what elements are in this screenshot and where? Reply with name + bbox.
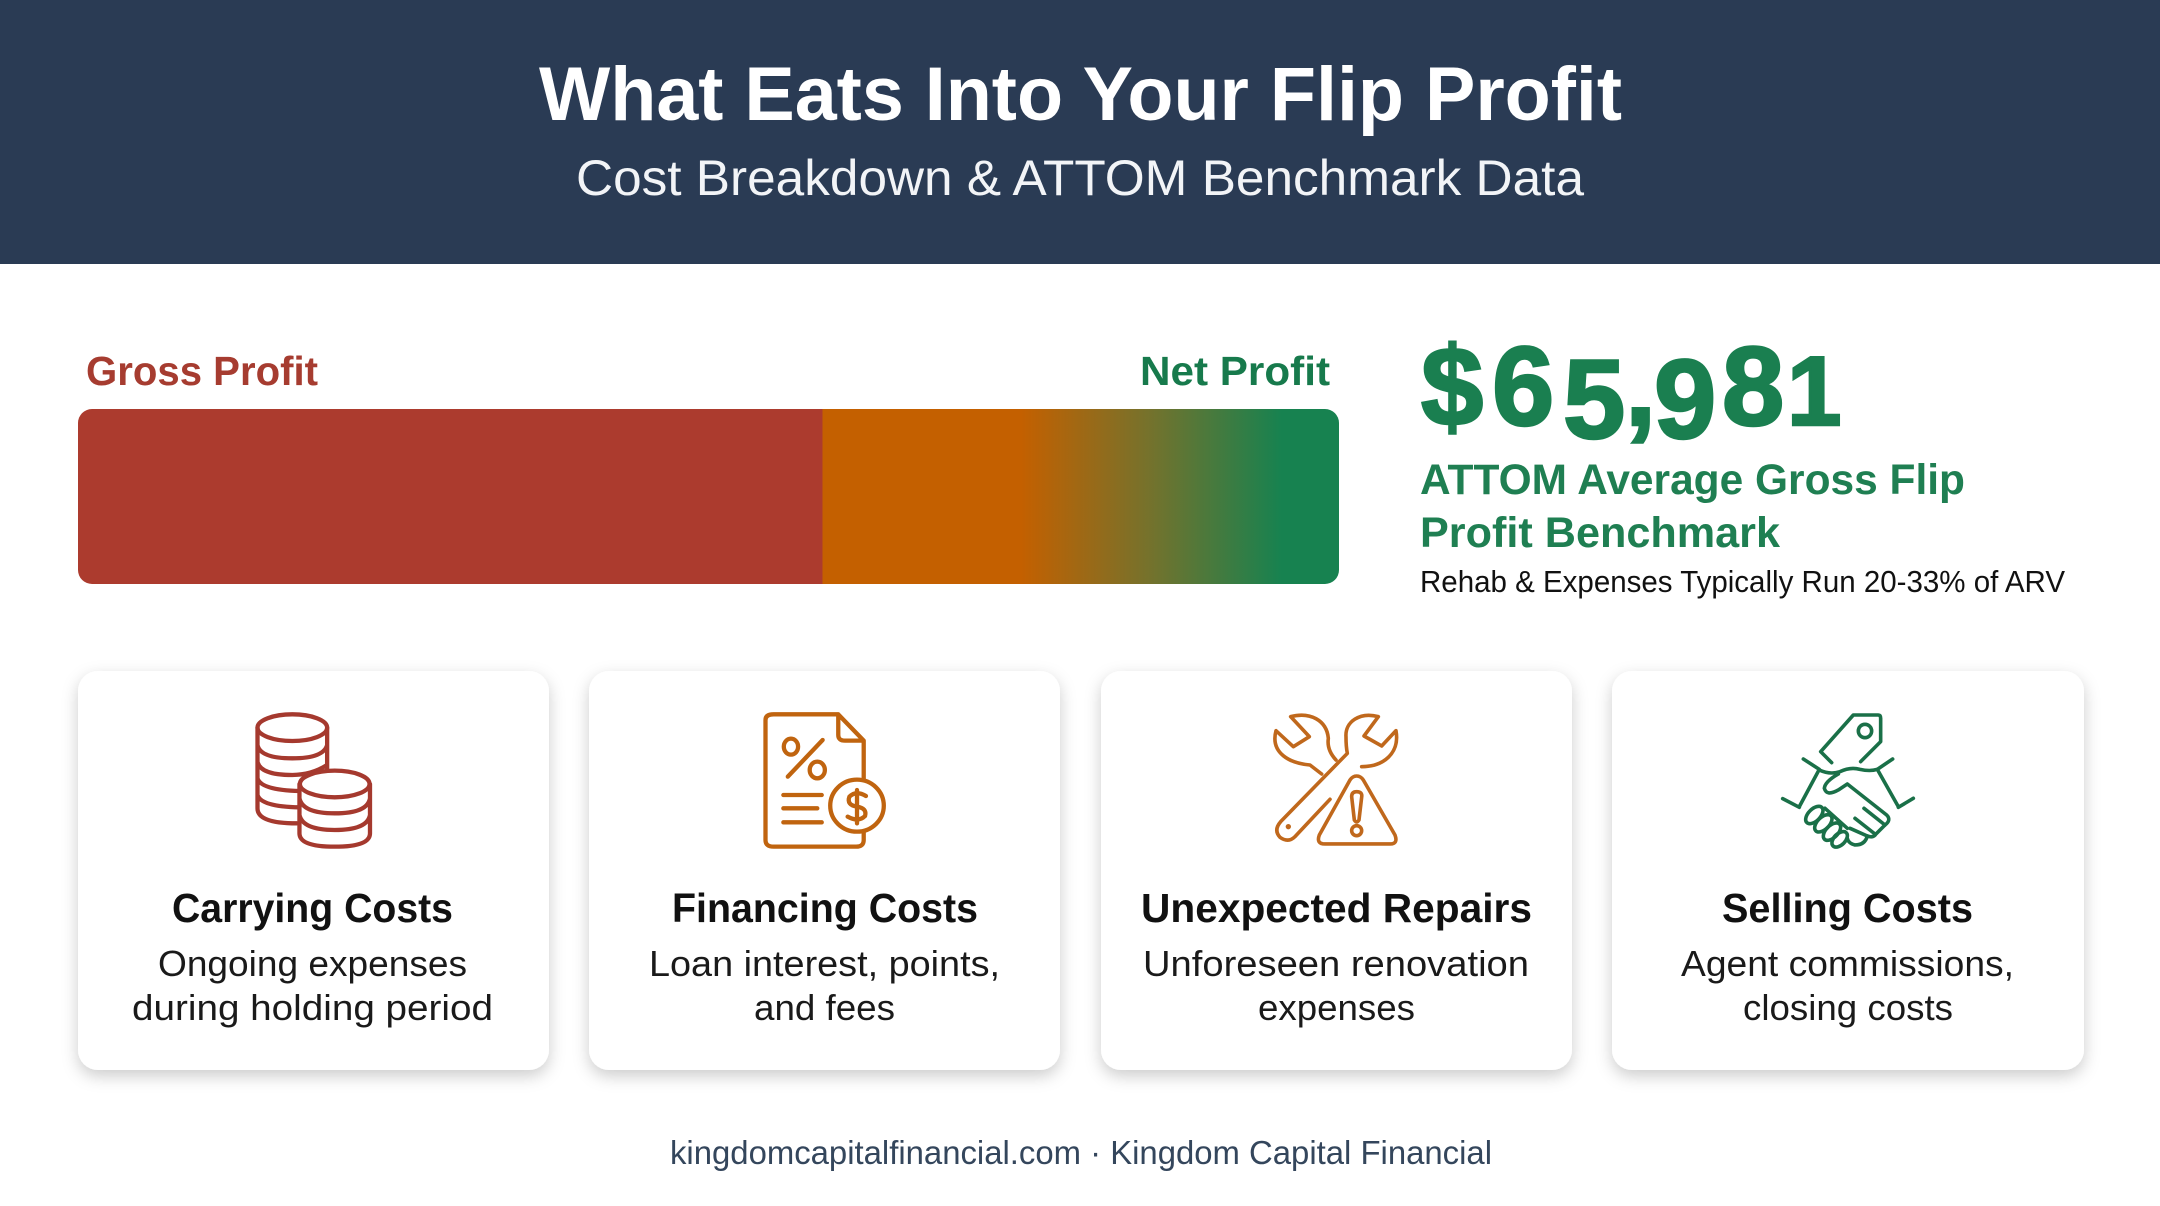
profit erosion bar: [78, 409, 1339, 584]
card heading: Carrying Costs: [172, 885, 453, 931]
card heading: Unexpected Repairs: [1141, 885, 1532, 931]
icon: crossed wrenches and warning triangle: [1275, 715, 1397, 844]
icon: price tag and handshake: [1783, 715, 1913, 850]
card heading: Selling Costs: [1722, 885, 1973, 931]
panel: selling costs: [1612, 671, 2084, 1070]
card description: Unforeseen renovation: [1143, 943, 1529, 984]
card description: closing costs: [1743, 987, 1953, 1028]
panel: carrying costs: [78, 671, 549, 1070]
icon: loan document with percent and dollar: [766, 714, 884, 847]
benchmark note: Rehab & Expenses Typically Run 20-33% of ARV: [1420, 564, 2065, 599]
title: What Eats Into Your Flip Profit: [539, 52, 1622, 137]
card description: during holding period: [132, 987, 493, 1028]
card description: Ongoing expenses: [158, 943, 467, 984]
benchmark block: [1420, 324, 2065, 599]
card description: Agent commissions,: [1681, 943, 2014, 984]
benchmark number: $65,98: [1421, 324, 1784, 462]
benchmark heading: Profit Benchmark: [1420, 509, 1780, 557]
label: net profit: Net Profit: [1140, 348, 1330, 394]
card description: expenses: [1258, 987, 1415, 1028]
benchmark number: 1: [1787, 336, 1842, 446]
panel: unexpected repairs: [1101, 671, 1572, 1070]
card description: Loan interest, points,: [649, 943, 1000, 984]
card description: and fees: [754, 987, 895, 1028]
footer: kingdomcapitalfinancial.com · Kingdom Capital Financial: [670, 1134, 1492, 1171]
label: gross profit: Gross Profit: [86, 348, 318, 394]
subtitle: Cost Breakdown & ATTOM Benchmark Data: [576, 150, 1584, 206]
benchmark heading: ATTOM Average Gross Flip: [1420, 456, 1965, 504]
header banner: [0, 0, 2160, 264]
card heading: Financing Costs: [672, 885, 978, 931]
panel: financing costs: [589, 671, 1060, 1070]
icon: coin stacks: [257, 714, 370, 847]
